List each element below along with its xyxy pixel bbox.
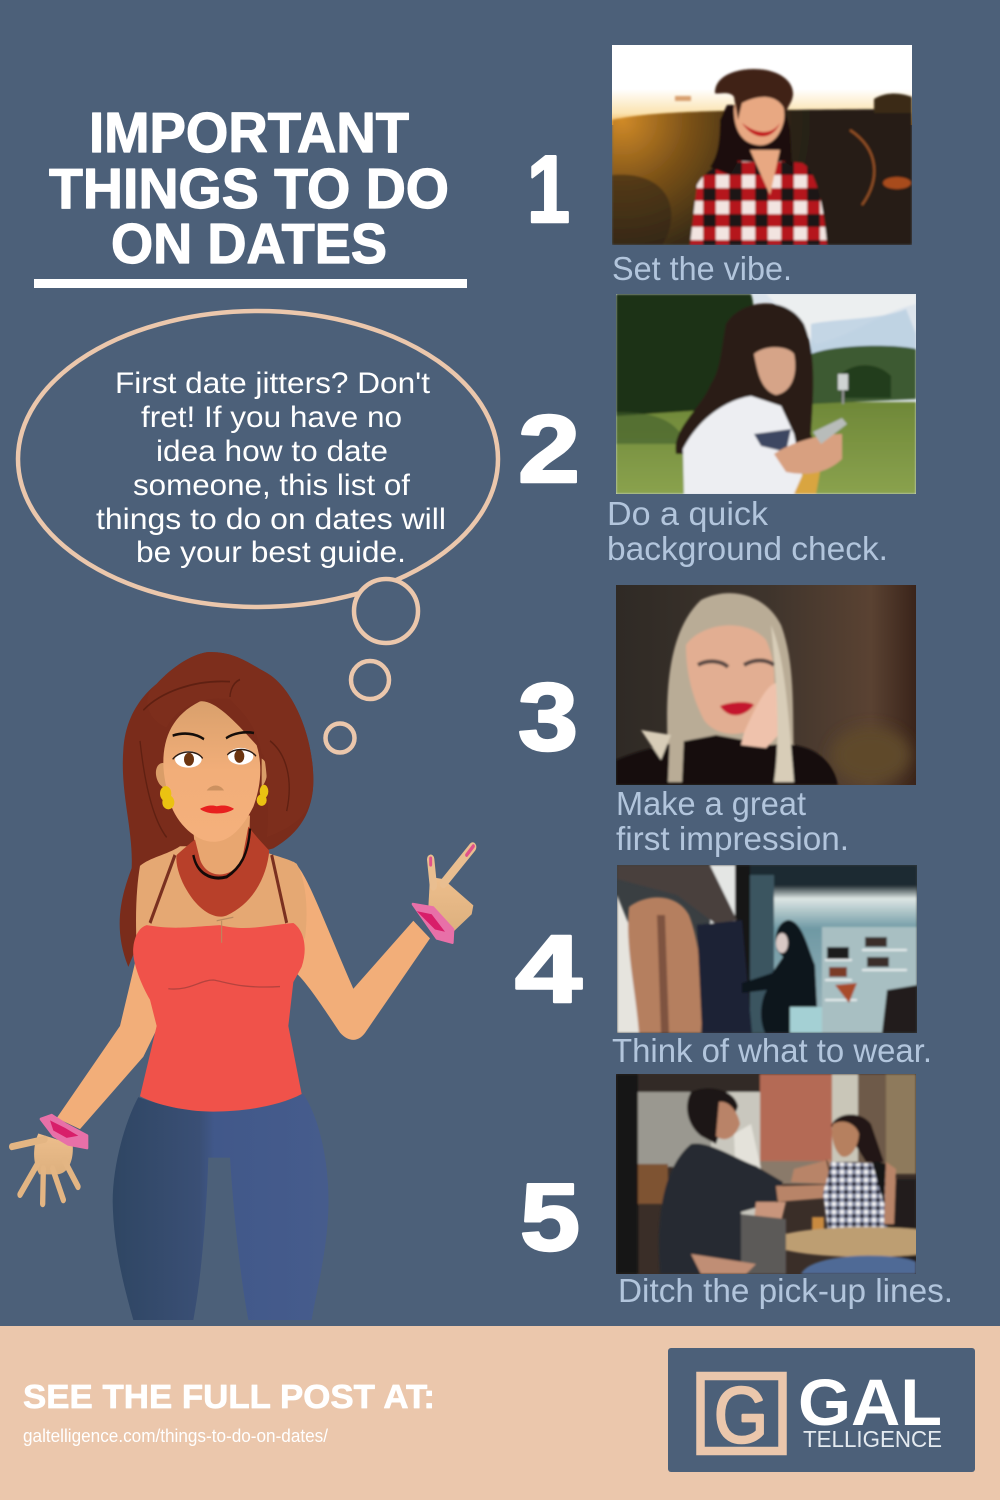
title underline [34, 279, 467, 288]
scarf [176, 826, 269, 917]
eyes [173, 748, 256, 768]
logo GAL: GAL [798, 1365, 942, 1439]
number 4: 4 [515, 916, 582, 1023]
intro text: idea how to date [156, 435, 388, 468]
nose [207, 786, 224, 790]
eyebrows [173, 732, 254, 739]
photo 4: clothes shop [617, 865, 917, 1033]
footer band [0, 1326, 1000, 1500]
caption 3: first impression. [616, 820, 849, 857]
intro text: someone, this list of [133, 469, 411, 502]
caption 1: Set the vibe. [612, 250, 792, 287]
footer url: galtelligence.com/things-to-do-on-dates/ [23, 1426, 328, 1446]
chest [136, 846, 307, 947]
intro text [96, 367, 446, 569]
hair front [147, 652, 313, 837]
footer heading: SEE THE FULL POST AT: [23, 1378, 435, 1415]
title: IMPORTANT [89, 101, 409, 165]
neck [192, 815, 250, 875]
right scrunchie [413, 904, 453, 943]
right arm [293, 862, 430, 1040]
seam [168, 980, 280, 989]
photo 3: blonde woman portrait [616, 585, 916, 785]
caption 3: Make a great [616, 785, 806, 822]
left scrunchie dark [50, 1120, 78, 1138]
top [133, 923, 305, 1112]
caption 2 [607, 495, 888, 567]
straps [150, 855, 287, 923]
logo [668, 1348, 975, 1472]
necklace [217, 917, 233, 943]
left hand [12, 1134, 78, 1204]
intro text: fret! If you have no [141, 401, 402, 434]
caption 3 [616, 785, 849, 857]
title: THINGS TO DO [49, 157, 449, 221]
photo 2: woman with phone [616, 294, 916, 494]
thought bubble [18, 311, 498, 752]
ears [156, 758, 267, 794]
logo square [700, 1376, 782, 1451]
hair strands [140, 679, 289, 837]
logo G: G [714, 1370, 768, 1459]
title [49, 101, 449, 276]
photo 1: woman in hat at sunset [612, 45, 912, 245]
intro text: First date jitters? Don't [115, 367, 431, 400]
face [163, 701, 260, 842]
left scrunchie [41, 1115, 87, 1148]
number 1: 1 [527, 136, 570, 243]
caption 5: Ditch the pick-up lines. [618, 1272, 953, 1309]
right hand [428, 846, 473, 932]
title: ON DATES [111, 212, 387, 276]
lips [200, 805, 234, 814]
earrings [160, 785, 268, 809]
woman illustration [12, 652, 473, 1320]
left arm [57, 956, 158, 1129]
caption 2: Do a quick [607, 495, 769, 532]
caption 2: background check. [607, 530, 888, 567]
caption 4: Think of what to wear. [612, 1032, 932, 1069]
intro text: things to do on dates will [96, 503, 446, 536]
photo 5: couple at cafe [616, 1074, 916, 1274]
logo TELLIGENCE: TELLIGENCE [803, 1426, 942, 1452]
jeans [113, 1094, 329, 1320]
intro text: be your best guide. [136, 536, 406, 569]
number 2: 2 [518, 396, 580, 503]
hair back [120, 652, 313, 967]
neckline shadow [193, 829, 250, 878]
number 5: 5 [520, 1164, 580, 1271]
number 3: 3 [518, 664, 578, 771]
